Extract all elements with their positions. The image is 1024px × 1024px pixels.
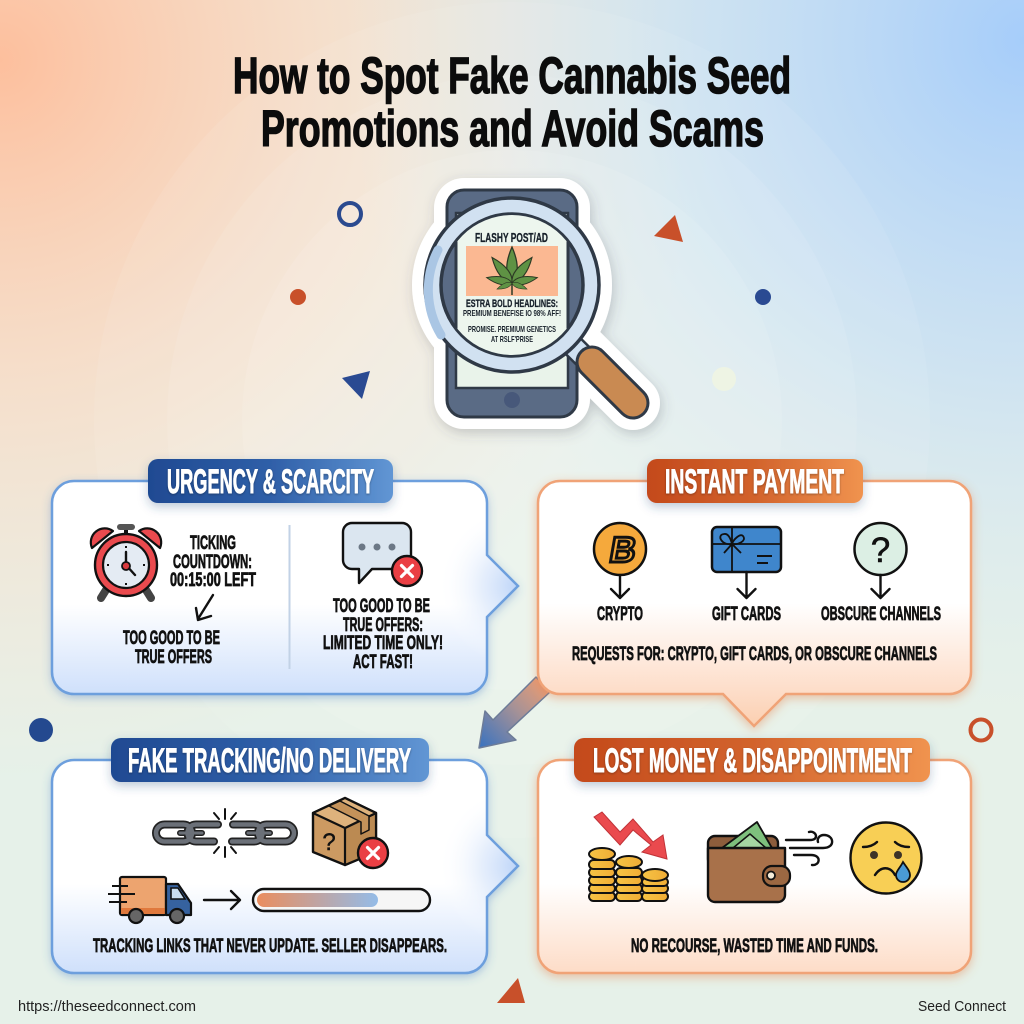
icon: package with x: ?: [322, 829, 336, 856]
heading: INSTANT PAYMENT: [665, 463, 844, 501]
text: offers right: LIMITED TIME ONLY!: [323, 633, 443, 654]
icon: question mark: OBSCURE CHANNELS: [821, 604, 941, 625]
ad poster in lens: AT RSLF'PRISE: [491, 334, 533, 344]
panel: urgency and scarcity: [52, 459, 520, 694]
panel body: [52, 760, 520, 973]
icon: chat bubble with x: [343, 523, 422, 586]
heading: FAKE TRACKING/NO DELIVERY: [128, 742, 411, 780]
panel body: [538, 760, 971, 973]
heading: [647, 459, 863, 503]
footer: brand: Seed Connect: [918, 999, 1006, 1015]
icon: bitcoin: CRYPTO: [597, 604, 643, 625]
phone: [447, 190, 577, 417]
hero icon: phone under magnifying glass: [412, 178, 633, 429]
text: offers right: TRUE OFFERS:: [343, 615, 423, 636]
icon: alarm clock: [91, 527, 161, 598]
text: countdown: [170, 533, 256, 591]
sticker outline: [412, 178, 633, 429]
footer: url: https://theseedconnect.com: [18, 999, 196, 1015]
icon: gift card: GIFT CARDS: [712, 604, 781, 625]
text: offers left: [123, 628, 220, 668]
text: countdown: COUNTDOWN:: [173, 552, 252, 573]
panel: fake tracking: [52, 738, 520, 973]
heading: [574, 738, 930, 782]
text: countdown: TICKING: [190, 533, 236, 554]
text: offers right: TOO GOOD TO BE: [333, 596, 430, 617]
panel body: [52, 481, 520, 694]
text: offers left: TOO GOOD TO BE: [123, 628, 220, 649]
icon: question mark: ?: [871, 531, 890, 570]
ad poster in lens: ESTRA BOLD HEADLINES:: [466, 298, 558, 310]
panel body: [538, 481, 971, 726]
title: [233, 47, 791, 157]
arrow: countdown to offers: [196, 595, 213, 620]
heading: [148, 459, 393, 503]
icon: question mark: [821, 523, 941, 625]
panel: lost money: [538, 738, 971, 973]
decorative shapes: [29, 203, 992, 1003]
icon: wind: [786, 832, 832, 865]
ad poster in lens: PROMISE. PREMIUM GENETICS: [468, 324, 556, 334]
icon: broken chain: [156, 809, 294, 857]
arrow: truck to progress bar: [204, 891, 240, 909]
arrow: payment to tracking: [479, 677, 550, 748]
icon: falling coins: [589, 812, 668, 901]
magnifying lens: [425, 198, 599, 372]
heading: [111, 738, 429, 782]
icon: bitcoin: B: [607, 529, 640, 570]
title: How to Spot Fake Cannabis Seed: [233, 47, 791, 104]
text: offers right: ACT FAST!: [353, 652, 413, 673]
icon: package with x: [313, 798, 388, 868]
text: tracking: TRACKING LINKS THAT NEVER UPDATE. SELLER DISAPPEARS.: [93, 936, 447, 957]
icon: bitcoin: [594, 523, 646, 625]
panel: instant payment: [538, 459, 971, 726]
text: offers right: [323, 596, 443, 673]
progress bar: [253, 889, 430, 911]
ad poster in lens: PREMIUM BENEFISE IO 98% AFF!: [463, 308, 561, 318]
text: offers left: TRUE OFFERS: [135, 647, 212, 668]
ad poster in lens: FLASHY POST/AD: [475, 230, 548, 245]
title: Promotions and Avoid Scams: [261, 100, 764, 157]
icon: wallet with cash: [708, 822, 790, 902]
icon: crying face: [850, 822, 922, 894]
ad poster in lens: [456, 212, 568, 360]
heading: URGENCY & SCARCITY: [167, 463, 374, 501]
text: countdown: 00:15:00 LEFT: [170, 570, 256, 591]
icon: gift card: [712, 527, 781, 625]
icon: cannabis leaf: [486, 247, 538, 295]
magnifying glass handle: [566, 339, 633, 403]
icon: delivery truck: [108, 877, 191, 923]
